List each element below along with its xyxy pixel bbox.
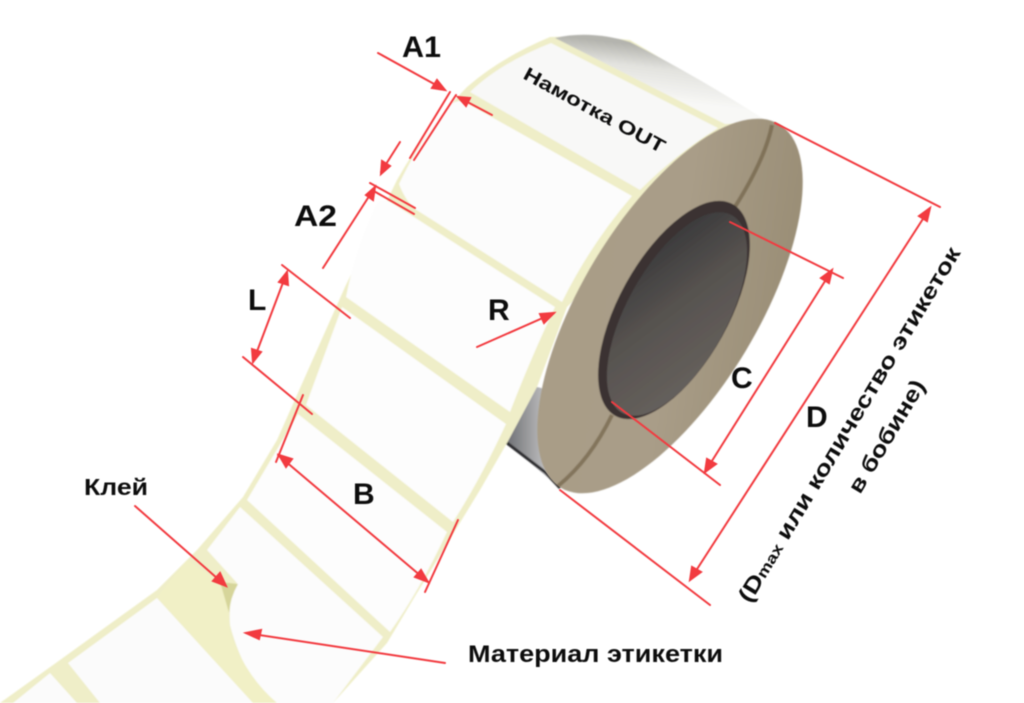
label B: B <box>353 478 375 511</box>
R arrow <box>477 313 554 347</box>
label: lower left <box>68 598 253 703</box>
label A2: A2 <box>294 200 337 233</box>
D lines <box>560 123 940 605</box>
label web and roll surface <box>0 35 770 703</box>
note second line: в бобине) <box>843 375 930 498</box>
roll side shadow <box>507 387 590 488</box>
label R: R <box>488 294 510 327</box>
label L: L <box>248 284 266 317</box>
label: peeled <box>207 507 383 703</box>
label D: D <box>806 401 828 434</box>
backing liner <box>0 36 770 703</box>
dimension lines <box>135 53 940 663</box>
A1 lines <box>378 53 492 160</box>
seam lower <box>558 415 612 486</box>
label: fifth <box>247 414 447 632</box>
material label: Материал этикетки <box>468 641 723 668</box>
label C: C <box>731 362 753 395</box>
peeled back area <box>157 560 277 703</box>
face ring <box>485 79 855 533</box>
label: third <box>346 200 555 412</box>
material arrow <box>246 630 445 663</box>
label: second <box>399 101 632 302</box>
side edge dark <box>507 443 560 488</box>
core hole <box>567 178 781 442</box>
glue corner <box>220 582 238 613</box>
label: fourth <box>306 307 506 522</box>
winding label: Намотка OUT <box>520 64 669 158</box>
C lines <box>612 222 843 485</box>
glue arrow <box>135 506 226 586</box>
roll end face <box>485 79 855 533</box>
label A1: A1 <box>402 31 441 64</box>
core inner <box>578 191 776 437</box>
B lines <box>276 395 458 592</box>
Dmax note: (Dmax или количество этикеток <box>733 241 966 607</box>
dimension text labels <box>84 31 966 668</box>
L lines <box>243 265 350 414</box>
seam upper <box>733 125 772 210</box>
label: bottom corner <box>13 673 77 703</box>
roll top strip <box>555 35 770 124</box>
label: winding label <box>470 43 718 190</box>
A2 lines <box>323 142 415 268</box>
glue label: Клей <box>84 474 148 500</box>
